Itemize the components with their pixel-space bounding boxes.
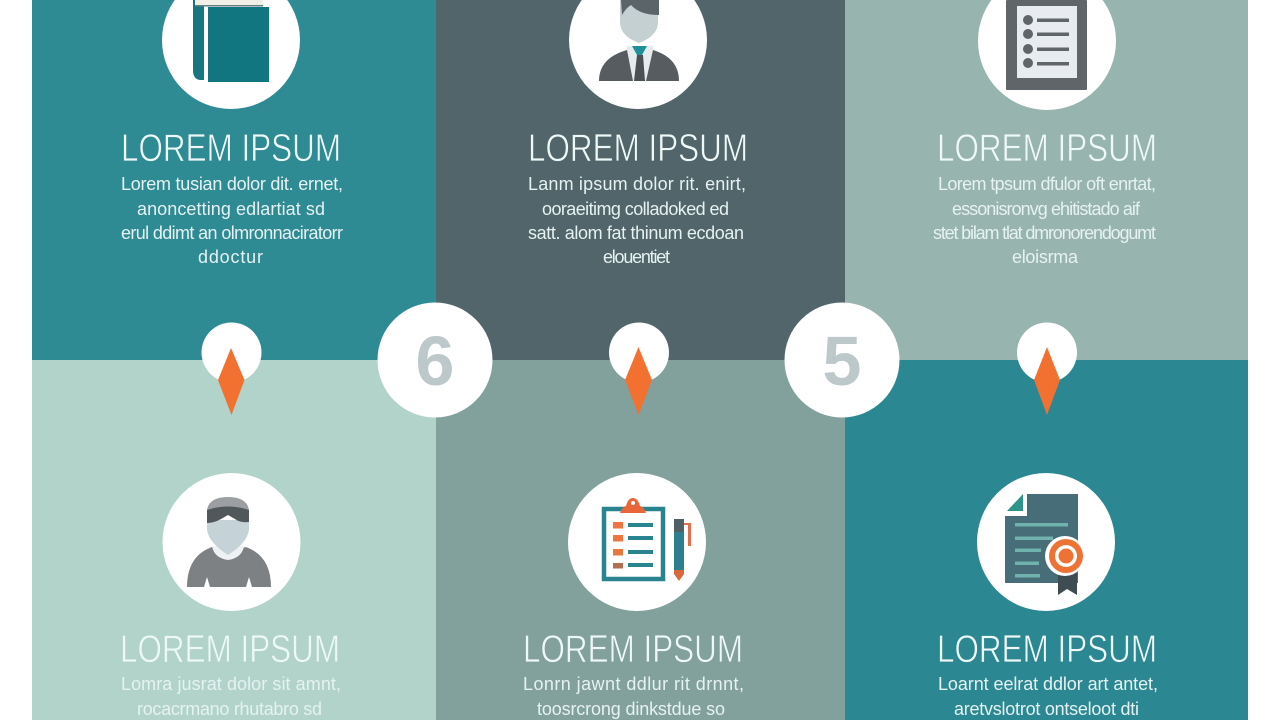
icon: certificate with seal xyxy=(1005,494,1085,595)
panel: bottom left xyxy=(32,360,436,720)
icon: person with goggles xyxy=(187,497,271,587)
body text: satt. alom fat thinum ecdoan xyxy=(528,223,744,243)
icon: businessman xyxy=(599,0,679,81)
icon: clipboard and pen xyxy=(604,498,691,581)
body text: Lonrn jawnt ddlur rit drnnt, xyxy=(523,674,744,694)
body text: aretvslotrot ontseloot dti xyxy=(954,699,1139,719)
body text: anoncetting edlartiat sd xyxy=(137,199,325,219)
heading: LOREM IPSUM xyxy=(528,127,748,170)
connector: right marker xyxy=(1017,322,1077,415)
body text: Lomra jusrat dolor sit amnt, xyxy=(121,674,341,694)
body text: Lorem tpsum dfulor oft enrtat, xyxy=(938,174,1156,194)
body text: Lanm ipsum dolor rit. enirt, xyxy=(528,174,746,194)
body text: eloisrma xyxy=(1012,247,1079,267)
icon: document list xyxy=(1006,0,1087,90)
body text: essonisronvg ehitistado aif xyxy=(952,199,1141,219)
body text: ooraeitimg colladoked ed xyxy=(542,199,729,219)
heading: LOREM IPSUM xyxy=(120,628,340,671)
body text xyxy=(938,674,1158,719)
body text: Lorem tusian dolor dit. ernet, xyxy=(121,174,343,194)
body text: ddoctur xyxy=(198,247,263,267)
heading: LOREM IPSUM xyxy=(523,628,743,671)
body text xyxy=(121,674,341,719)
body text xyxy=(523,674,744,719)
body text xyxy=(121,174,343,267)
body text: erul ddimt an olmronnaciratorr xyxy=(121,223,343,243)
number badge: 5: 5 xyxy=(823,322,861,400)
connector: middle marker xyxy=(609,322,669,415)
heading: LOREM IPSUM xyxy=(937,127,1157,170)
body text: stet bilam tlat dmronorendogumt xyxy=(933,223,1156,243)
panel: bottom right xyxy=(845,360,1248,720)
body text: Loarnt eelrat ddlor art antet, xyxy=(938,674,1158,694)
body text xyxy=(933,174,1156,267)
number badge: 5 xyxy=(784,302,900,418)
number badge: 6 xyxy=(378,302,492,418)
icon: book xyxy=(193,0,269,82)
panel: top middle xyxy=(436,0,845,360)
panel: top right xyxy=(845,0,1248,360)
connector: left marker xyxy=(202,322,262,415)
body text: rocacrmano rhutabro sd xyxy=(137,699,322,719)
body text: toosrcrong dinkstdue so xyxy=(537,699,725,719)
heading: LOREM IPSUM xyxy=(121,127,341,170)
panel: top left xyxy=(32,0,436,360)
heading: LOREM IPSUM xyxy=(937,628,1157,671)
panel: bottom middle xyxy=(436,360,845,720)
number badge: 6: 6 xyxy=(416,322,454,400)
body text: elouentiet xyxy=(603,247,670,267)
body text xyxy=(528,174,746,267)
